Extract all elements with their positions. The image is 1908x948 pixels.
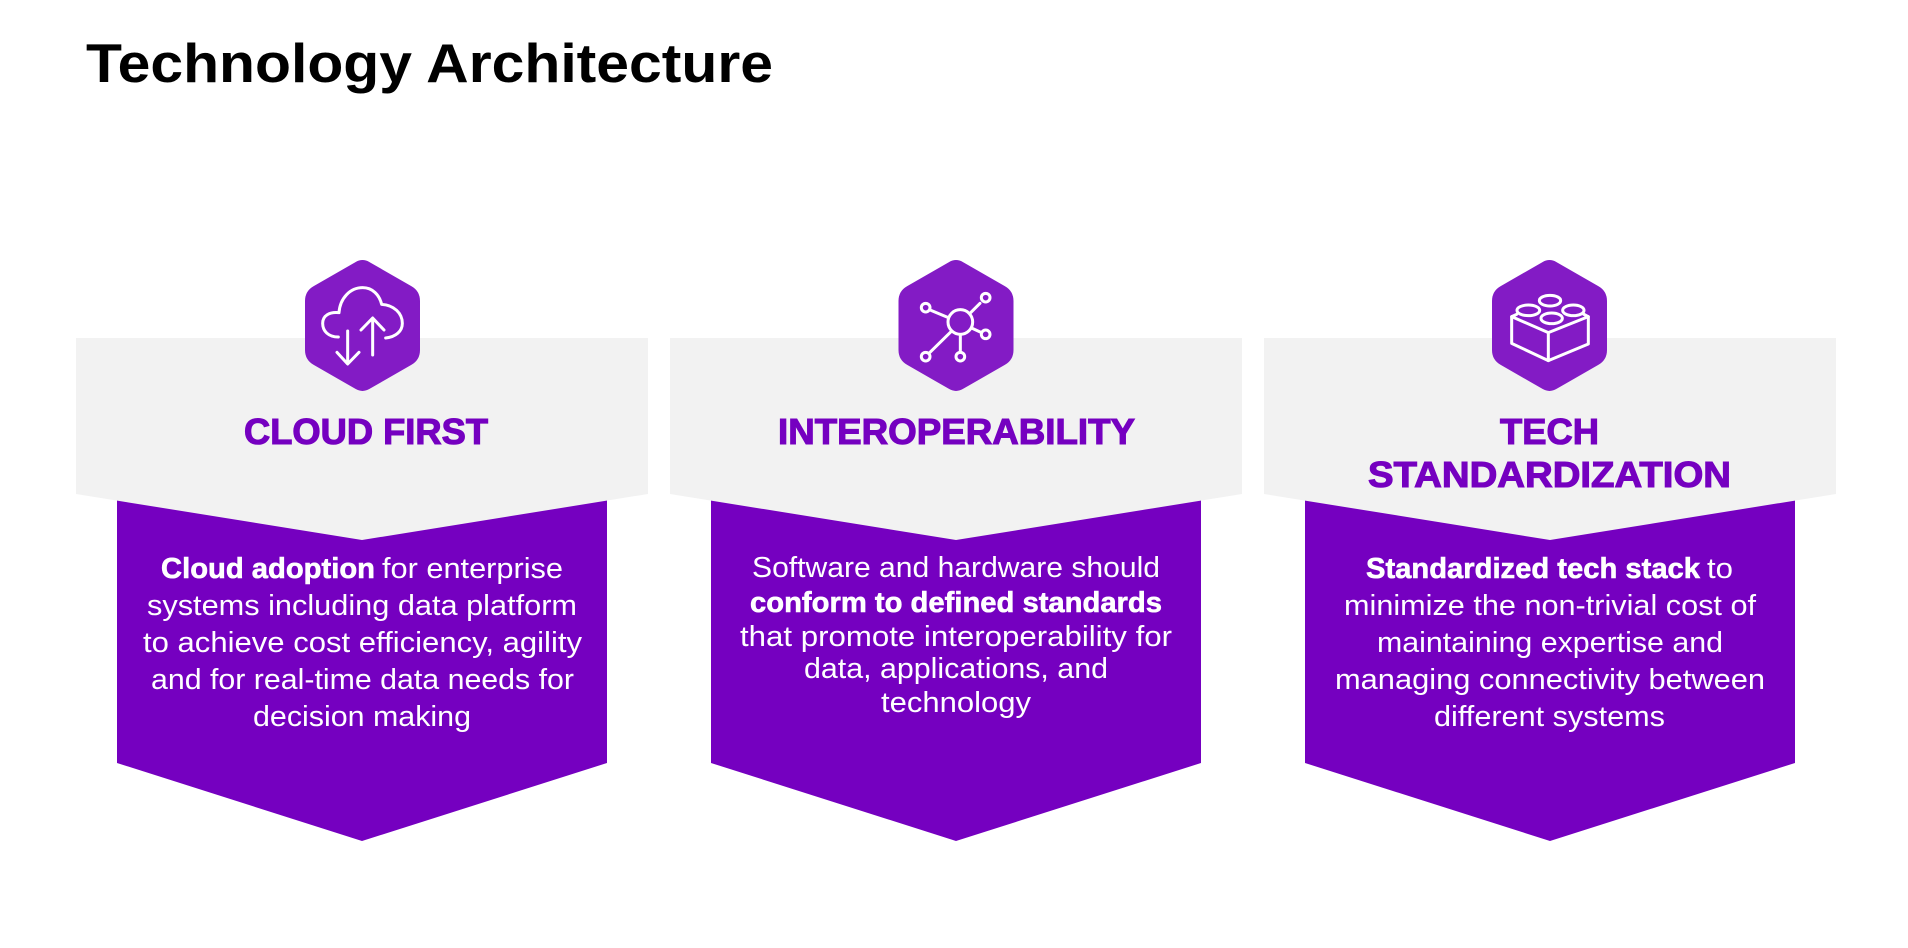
title: Technology Architecture xyxy=(86,32,773,94)
icon: cloud upload download xyxy=(305,260,420,391)
body text: interoperability xyxy=(740,552,1172,719)
body text: cloud first xyxy=(143,553,583,733)
heading: cloud first: CLOUD FIRST xyxy=(244,411,488,452)
purple body chevron xyxy=(711,480,1201,841)
panel: interoperability xyxy=(670,260,1242,841)
body text: tech standardization: minimize the non-trivial cost of xyxy=(1344,590,1757,622)
icon: network hub xyxy=(898,260,1014,391)
panel: cloud first xyxy=(76,260,648,841)
purple body chevron xyxy=(117,480,607,841)
body text: tech standardization: maintaining expertise and xyxy=(1377,627,1723,659)
body text: cloud first: Cloud adoption xyxy=(161,553,375,585)
body text: cloud first: and for real-time data needs for xyxy=(151,664,574,696)
heading: tech standardization xyxy=(1368,411,1731,495)
body text: interoperability: conform to defined standards xyxy=(750,587,1162,619)
body text: tech standardization: Standardized tech stack xyxy=(1366,553,1701,585)
heading: interoperability: INTEROPERABILITY xyxy=(778,411,1135,452)
body text: tech standardization xyxy=(1335,553,1765,733)
body text: interoperability: Software and hardware should xyxy=(752,552,1160,584)
grey header xyxy=(1264,338,1836,540)
body text: cloud first: to achieve cost efficiency, agility xyxy=(143,627,583,659)
body text: cloud first: decision making xyxy=(253,701,471,733)
grey header xyxy=(670,338,1242,540)
body text: tech standardization: managing connectivity between xyxy=(1335,664,1765,696)
body text: cloud first: for enterprise xyxy=(382,553,563,585)
grey header xyxy=(76,338,648,540)
heading: tech standardization: TECH xyxy=(1500,411,1599,452)
purple body chevron xyxy=(1305,480,1795,841)
body text: interoperability: that promote interoperability for xyxy=(740,621,1172,653)
body text: tech standardization: to xyxy=(1707,553,1733,585)
body text: cloud first: systems including data platform xyxy=(147,590,577,622)
body text: interoperability: technology xyxy=(881,687,1032,719)
icon: building block xyxy=(1492,260,1607,391)
body text: tech standardization: different systems xyxy=(1434,701,1665,733)
heading: tech standardization: STANDARDIZATION xyxy=(1368,454,1731,495)
body text: interoperability: data, applications, and xyxy=(804,653,1108,685)
panel: tech standardization xyxy=(1264,260,1836,841)
